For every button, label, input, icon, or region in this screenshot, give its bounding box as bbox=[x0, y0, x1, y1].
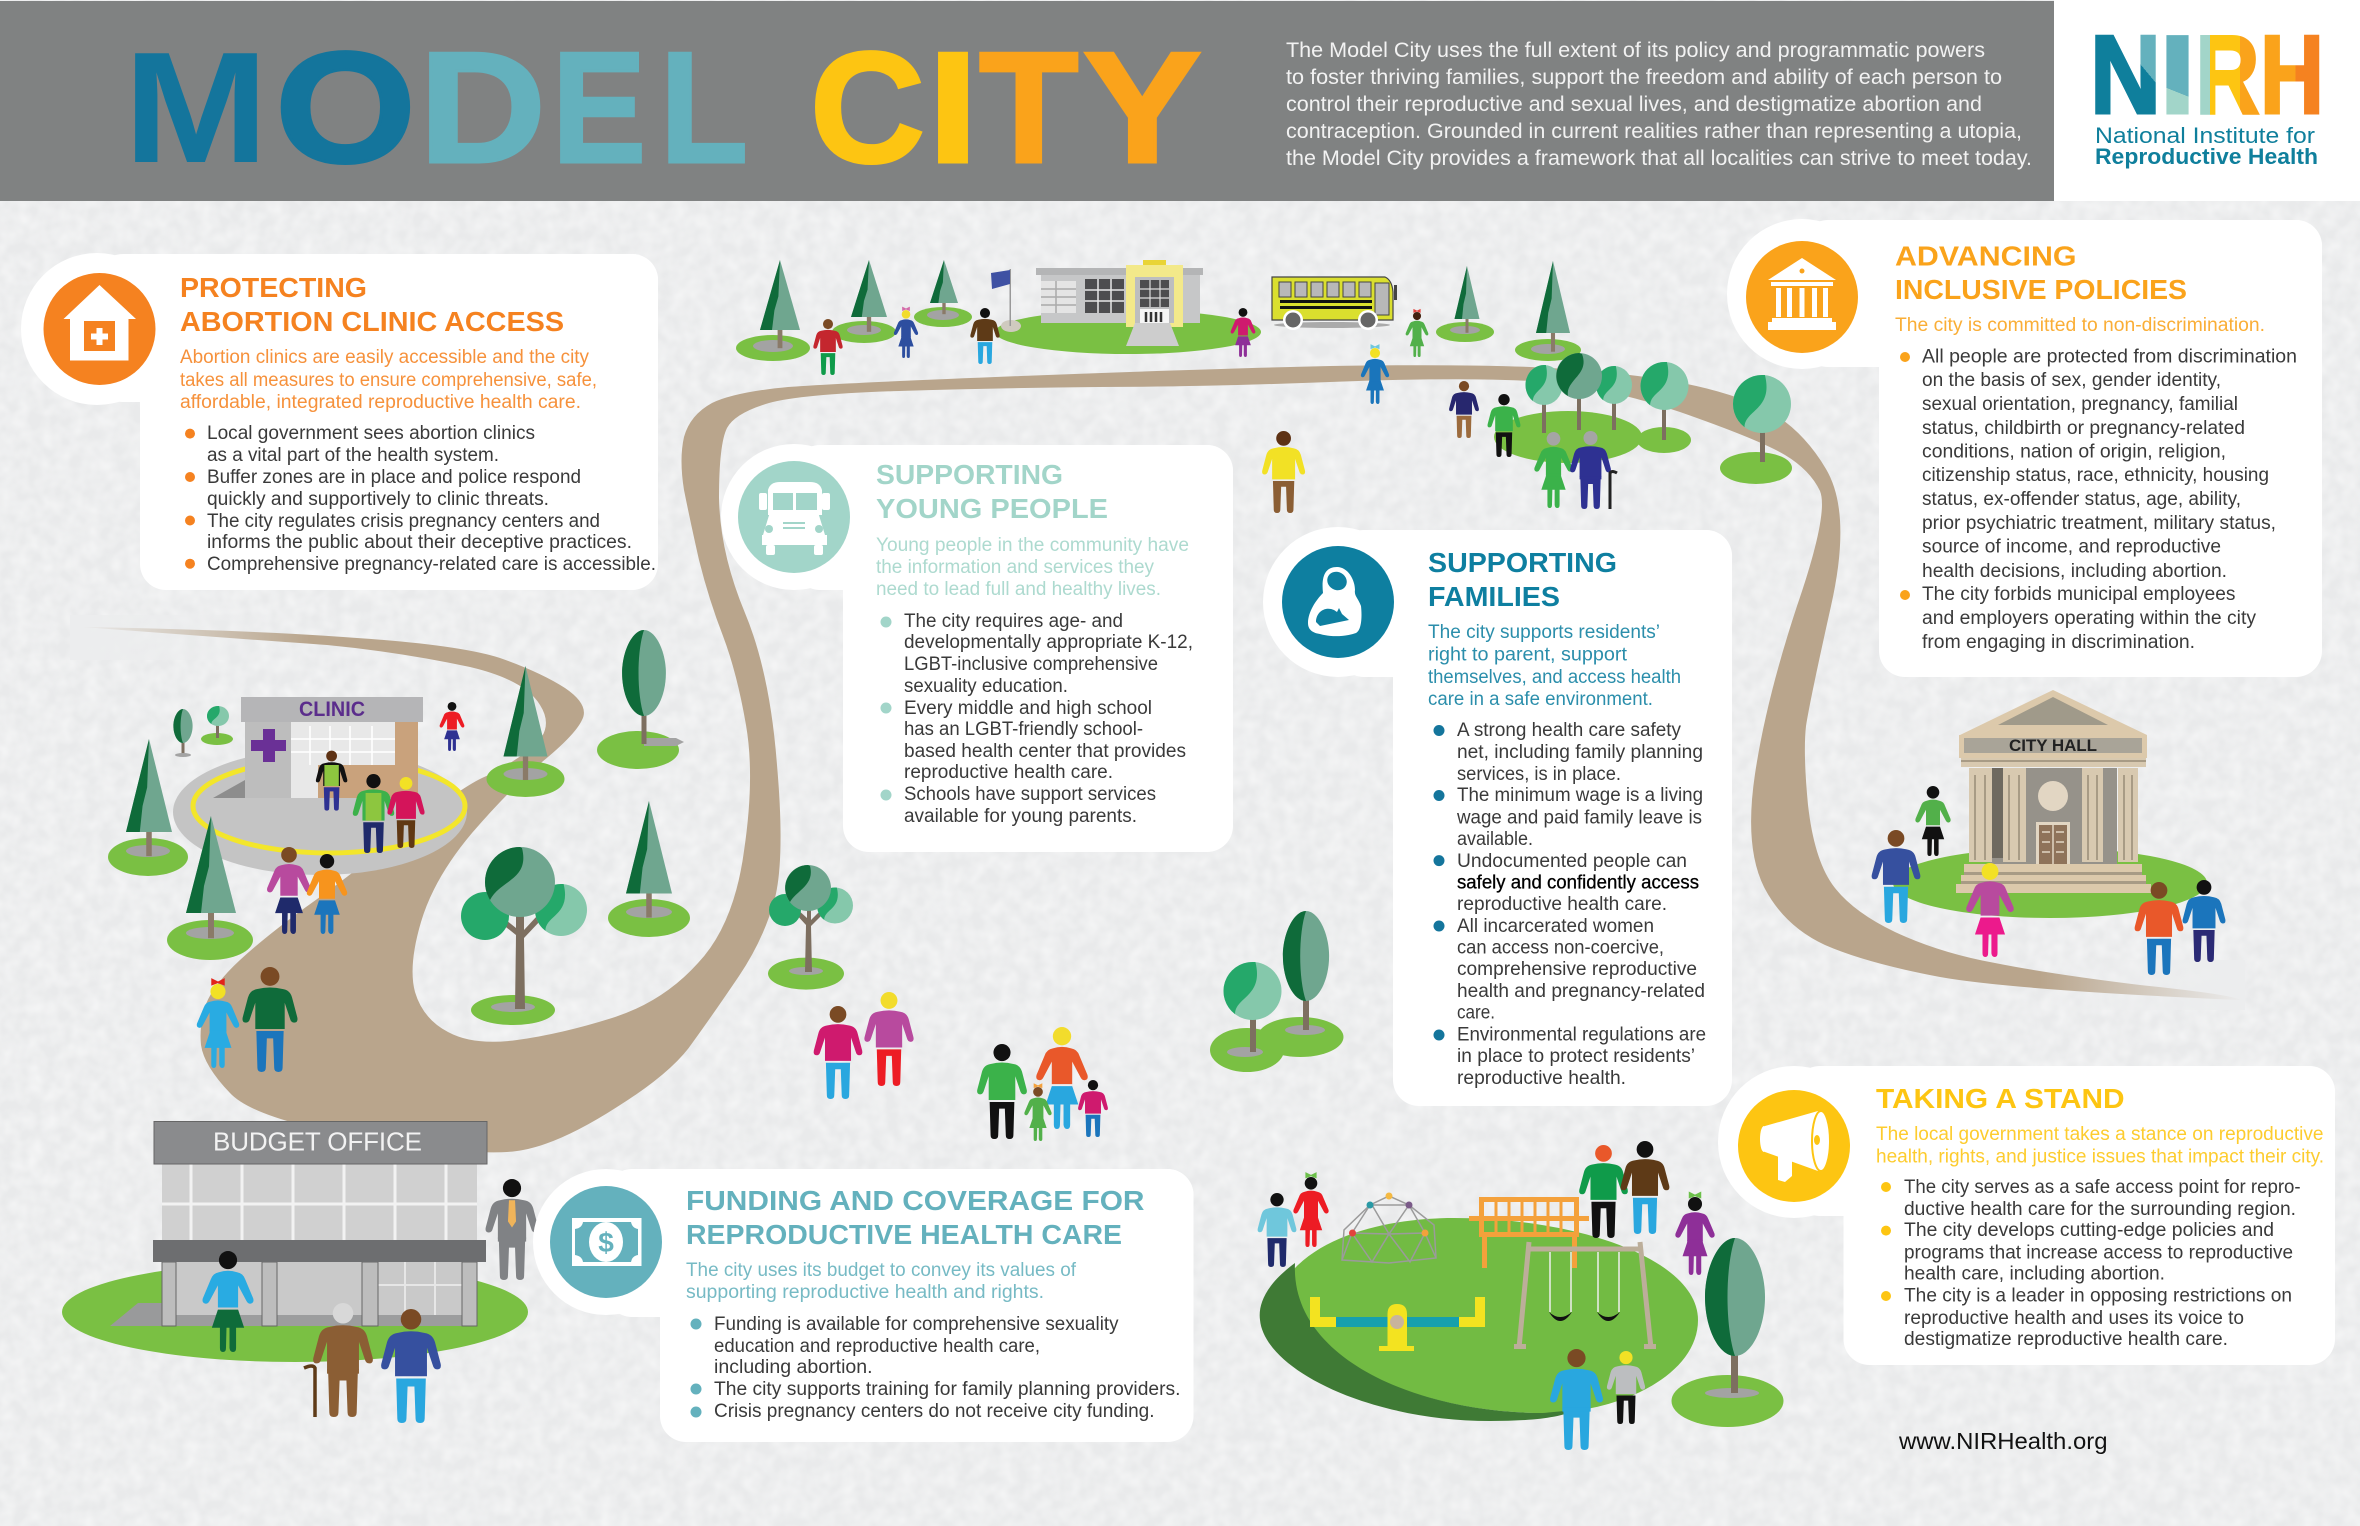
bullet list: on the basis of sex, gender identity, bbox=[1922, 370, 2221, 391]
bullet list: Environmental regulations are bbox=[1457, 1024, 1706, 1046]
person bbox=[1872, 830, 1920, 923]
logo: NIRH: N bbox=[2090, 13, 2161, 137]
panel: funding and coverage bbox=[533, 1169, 1194, 1442]
oval tree bbox=[1672, 1238, 1784, 1427]
scene: school grounds bbox=[736, 260, 1581, 361]
bullet list: can access non-coercive, bbox=[1457, 938, 1664, 959]
summary: Abortion clinics are easily accessible and the city bbox=[180, 347, 589, 368]
bullet list: All incarcerated women bbox=[1457, 916, 1654, 937]
person bbox=[307, 854, 347, 934]
oval tree bbox=[597, 630, 684, 769]
bullet list: Every middle and high school bbox=[904, 698, 1152, 719]
seesaw bbox=[1310, 1297, 1485, 1351]
person bbox=[440, 702, 464, 751]
panel background bbox=[1263, 527, 1732, 1106]
logo: NIRH: R bbox=[2196, 13, 2260, 137]
city hall building: CITY HALL bbox=[2009, 736, 2097, 755]
heading bbox=[686, 1185, 1144, 1250]
person bbox=[813, 319, 843, 375]
bullet list: health care, including abortion. bbox=[1904, 1264, 2165, 1285]
person bbox=[1966, 863, 2014, 957]
person bbox=[1579, 1145, 1628, 1238]
bullet list: Undocumented people can bbox=[1457, 851, 1687, 872]
bullet list: status, childbirth or pregnancy-related bbox=[1922, 418, 2245, 439]
person bbox=[1621, 1141, 1669, 1234]
clinic building bbox=[213, 697, 423, 798]
clinic building: CLINIC bbox=[299, 698, 365, 721]
bullet list: prior psychiatric treatment, military status, bbox=[1922, 513, 2276, 534]
elder with cane bbox=[304, 1303, 373, 1417]
bullet list: developmentally appropriate K-12, bbox=[904, 632, 1193, 653]
scene: clinic bbox=[108, 630, 1344, 1072]
playground lawn bbox=[1293, 1218, 1698, 1413]
panel background bbox=[533, 1169, 1194, 1442]
person bbox=[2135, 882, 2183, 975]
tree trunks bbox=[1542, 395, 1765, 462]
summary bbox=[1428, 622, 1681, 710]
panel: protecting abortion clinic access bbox=[21, 253, 658, 590]
person bbox=[1262, 431, 1305, 513]
tree beside road bbox=[768, 865, 853, 990]
heading: ADVANCING bbox=[1895, 241, 2076, 272]
person bbox=[864, 992, 914, 1086]
pine tree bbox=[736, 260, 810, 361]
bullet list: reproductive health and uses its voice to bbox=[1904, 1308, 2244, 1329]
panel background bbox=[721, 444, 1233, 852]
office lawn bbox=[62, 1262, 528, 1362]
person bbox=[1915, 786, 1951, 856]
bullet list: status, ex-offender status, age, ability, bbox=[1922, 489, 2241, 510]
scene: park trees top right bbox=[1494, 353, 1792, 484]
round tree bbox=[1640, 362, 1688, 410]
bullet list bbox=[1434, 720, 1706, 1089]
summary: health, rights, and justice issues that impact their city. bbox=[1876, 1147, 2324, 1168]
heading: ABORTION CLINIC ACCESS bbox=[180, 306, 564, 337]
person bbox=[381, 1309, 441, 1423]
bullet list: The city serves as a safe access point for repro- bbox=[1904, 1177, 2301, 1198]
person in suit bbox=[486, 1179, 538, 1280]
bullet list: and employers operating within the city bbox=[1922, 608, 2256, 629]
child bbox=[1078, 1080, 1108, 1137]
logo: NIRH: I bbox=[2160, 13, 2196, 137]
logo: NIRH: Reproductive Health bbox=[2095, 144, 2318, 169]
header band bbox=[0, 1, 2054, 201]
summary: supporting reproductive health and rights. bbox=[686, 1282, 1044, 1303]
panel: taking a stand bbox=[1718, 1066, 2335, 1365]
lawn bbox=[1494, 411, 1792, 484]
pine tree bbox=[914, 260, 972, 327]
heading: REPRODUCTIVE HEALTH CARE bbox=[686, 1219, 1122, 1250]
clinic plaza bbox=[173, 749, 467, 875]
title: MODEL CITY: C bbox=[810, 20, 925, 196]
bullet list: wage and paid family leave is bbox=[1456, 808, 1702, 828]
bullet list: services, is in place. bbox=[1457, 764, 1621, 785]
bullet list: health and pregnancy-related bbox=[1457, 981, 1705, 1002]
bench bbox=[1469, 1197, 1589, 1268]
summary: The city supports residents’ bbox=[1428, 622, 1660, 643]
summary: affordable, integrated reproductive health care. bbox=[180, 392, 581, 413]
title: MODEL CITY bbox=[124, 20, 1202, 196]
logo: NIRH bbox=[2090, 13, 2324, 169]
icon: dollar bill bbox=[550, 1186, 662, 1298]
pine tree bbox=[1515, 261, 1581, 361]
website url: www.NIRHealth.org bbox=[1898, 1428, 2108, 1454]
bullet list: Crisis pregnancy centers do not receive city funding. bbox=[714, 1401, 1154, 1422]
scene: city hall bbox=[1893, 690, 2207, 918]
summary: care in a safe environment. bbox=[1428, 689, 1653, 710]
bullet list bbox=[1900, 346, 2297, 653]
city hall building bbox=[1956, 690, 2151, 893]
bullet list: comprehensive reproductive bbox=[1457, 959, 1697, 980]
heading: YOUNG PEOPLE bbox=[876, 493, 1108, 524]
person bbox=[267, 847, 311, 934]
round tree bbox=[1526, 365, 1562, 405]
swing set bbox=[1514, 1242, 1656, 1349]
bullet list: Comprehensive pregnancy-related care is accessible. bbox=[207, 554, 656, 575]
heading: PROTECTING bbox=[180, 272, 367, 303]
school lawn bbox=[995, 310, 1261, 354]
bullet list: available for young parents. bbox=[904, 806, 1137, 827]
bullet list: education and reproductive health care, bbox=[714, 1336, 1040, 1357]
bullet list: conditions, nation of origin, religion, bbox=[1922, 442, 2226, 463]
bullet list bbox=[690, 1314, 1180, 1422]
summary: the information and services they bbox=[876, 557, 1154, 578]
title: MODEL CITY: E bbox=[552, 20, 646, 196]
pine tree bbox=[832, 260, 896, 343]
person bbox=[977, 1044, 1027, 1139]
intro paragraph: the Model City provides a framework that all localities can strive to meet today. bbox=[1286, 146, 2032, 170]
title: MODEL CITY: D bbox=[419, 20, 546, 196]
bullet list: The city supports training for family planning providers. bbox=[714, 1379, 1180, 1400]
bullet list: quickly and supportively to clinic threats. bbox=[207, 489, 549, 510]
bullet list: Local government sees abortion clinics bbox=[207, 423, 535, 444]
intro paragraph: control their reproductive and sexual lives, and destigmatize abortion and bbox=[1286, 92, 1982, 116]
bullet list: reproductive health care. bbox=[1457, 894, 1667, 915]
road fade left bbox=[70, 615, 310, 660]
heading: SUPPORTING bbox=[876, 459, 1063, 490]
bullet list: citizenship status, race, ethnicity, housing bbox=[1922, 465, 2269, 486]
bullet list: ductive health care for the surrounding region. bbox=[1904, 1199, 2296, 1220]
person bbox=[1293, 1172, 1329, 1247]
bullet list bbox=[185, 423, 656, 575]
title: MODEL CITY: O bbox=[275, 20, 416, 196]
road fade right bbox=[2040, 960, 2245, 1010]
pine tree bbox=[167, 816, 253, 960]
intro paragraph: contraception. Grounded in current realities rather than representing a utopia, bbox=[1286, 119, 2022, 143]
bullet list: The city requires age- and bbox=[904, 611, 1123, 632]
person bbox=[1406, 309, 1428, 357]
person bbox=[894, 307, 918, 358]
heading bbox=[876, 459, 1108, 524]
heading: FUNDING AND COVERAGE FOR bbox=[686, 1185, 1144, 1216]
person bbox=[2183, 880, 2225, 962]
summary bbox=[1876, 1124, 2324, 1168]
large tree bbox=[461, 847, 587, 1025]
bullet list: All people are protected from discrimination bbox=[1922, 346, 2297, 368]
panel background bbox=[1727, 219, 2322, 677]
panel: supporting young people bbox=[721, 444, 1233, 852]
winding road bbox=[82, 365, 2240, 1152]
person bbox=[387, 777, 425, 848]
bullet list: sexuality education. bbox=[904, 676, 1068, 697]
climbing dome bbox=[1342, 1192, 1436, 1263]
bullet list: Funding is available for comprehensive sexuality bbox=[714, 1314, 1119, 1335]
person bbox=[242, 967, 298, 1072]
bullet list: safely and confidently access bbox=[1457, 872, 1699, 894]
icon: mother and child bbox=[1282, 546, 1394, 658]
bullet list: available. bbox=[1457, 829, 1533, 850]
person bbox=[970, 308, 1000, 364]
round tree bbox=[1733, 375, 1791, 433]
bullet list: reproductive health care. bbox=[904, 762, 1113, 783]
bullet list: including abortion. bbox=[714, 1357, 873, 1378]
bullet list: source of income, and reproductive bbox=[1922, 537, 2221, 558]
heading: TAKING A STAND bbox=[1876, 1083, 2125, 1114]
round tree bbox=[1596, 366, 1632, 404]
bullet list: Schools have support services bbox=[904, 784, 1156, 805]
pine tree bbox=[486, 666, 564, 797]
heading bbox=[1428, 547, 1617, 612]
logo box bbox=[2054, 0, 2360, 201]
bullet list: sexual orientation, pregnancy, familial bbox=[1922, 394, 2238, 415]
bullet list bbox=[880, 611, 1193, 827]
person bbox=[197, 978, 239, 1068]
summary: right to parent, support bbox=[1428, 644, 1628, 666]
person bbox=[1675, 1192, 1715, 1275]
small round tree bbox=[201, 706, 233, 745]
summary: The city uses its budget to convey its values of bbox=[686, 1260, 1077, 1281]
summary: takes all measures to ensure comprehensive, safe, bbox=[180, 370, 597, 391]
panel: advancing inclusive policies bbox=[1727, 219, 2322, 677]
bullet list: has an LGBT-friendly school- bbox=[904, 719, 1143, 740]
summary: The city is committed to non-discrimination. bbox=[1895, 315, 2265, 336]
bullet list: in place to protect residents’ bbox=[1457, 1046, 1695, 1067]
title: MODEL CITY: T bbox=[979, 20, 1079, 196]
intro paragraph: The Model City uses the full extent of its policy and programmatic powers bbox=[1286, 38, 1985, 62]
clinic escort bbox=[353, 774, 394, 853]
person bbox=[1361, 344, 1389, 404]
bullet list: net, including family planning bbox=[1457, 742, 1703, 763]
bullet list: A strong health care safety bbox=[1457, 720, 1681, 741]
bullet list: The city develops cutting-edge policies and bbox=[1904, 1220, 2274, 1241]
icon: school bus bbox=[738, 461, 850, 573]
person bbox=[1607, 1351, 1645, 1424]
bullet list: from engaging in discrimination. bbox=[1922, 632, 2195, 653]
panel: supporting families bbox=[1263, 527, 1732, 1106]
school bus bbox=[1272, 277, 1397, 330]
bullet list bbox=[1881, 1177, 2301, 1350]
summary bbox=[180, 347, 597, 413]
bullet list: LGBT-inclusive comprehensive bbox=[904, 654, 1158, 675]
clinic escort bbox=[316, 751, 347, 811]
pine tree bbox=[608, 801, 690, 937]
bullet list: reproductive health. bbox=[1457, 1068, 1626, 1089]
person bbox=[1487, 394, 1521, 457]
bullet list: informs the public about their deceptive practices. bbox=[207, 532, 632, 553]
title: MODEL CITY: M bbox=[124, 20, 268, 196]
bullet list: based health center that provides bbox=[904, 741, 1186, 762]
budget office building bbox=[110, 1122, 487, 1326]
panel background bbox=[21, 253, 658, 590]
bullet list: programs that increase access to reproductive bbox=[1904, 1242, 2293, 1264]
city hall lawn bbox=[1893, 848, 2207, 918]
icon: megaphone bbox=[1738, 1090, 1850, 1202]
summary: themselves, and access health bbox=[1428, 667, 1681, 688]
heading bbox=[180, 272, 564, 337]
intro paragraph bbox=[1286, 38, 2032, 170]
person bbox=[1534, 432, 1573, 508]
elder with cane bbox=[1570, 431, 1617, 509]
school building bbox=[1036, 260, 1203, 346]
summary: The local government takes a stance on reproductive bbox=[1876, 1124, 2324, 1145]
icon: dollar bill: $ bbox=[598, 1227, 614, 1258]
heading: INCLUSIVE POLICIES bbox=[1895, 274, 2187, 305]
buffer zone ring bbox=[193, 759, 465, 853]
icon: government columns bbox=[1746, 241, 1858, 353]
title: MODEL CITY: I bbox=[928, 20, 978, 196]
round tree dark bbox=[1556, 353, 1602, 399]
bullet list: destigmatize reproductive health care. bbox=[1904, 1329, 2228, 1350]
tree pair bbox=[1210, 911, 1344, 1072]
person bbox=[1231, 308, 1255, 357]
summary: need to lead full and healthy lives. bbox=[876, 579, 1161, 600]
bullet list: care. bbox=[1457, 1003, 1495, 1024]
small oval tree bbox=[173, 709, 193, 757]
pine tree bbox=[1436, 266, 1494, 342]
intro paragraph: to foster thriving families, support the freedom and ability of each person to bbox=[1286, 65, 2002, 89]
bullet list: The minimum wage is a living bbox=[1457, 785, 1703, 806]
logo: NIRH: H bbox=[2260, 13, 2324, 137]
summary bbox=[686, 1260, 1077, 1303]
heading: SUPPORTING bbox=[1428, 547, 1617, 578]
budget office building: BUDGET OFFICE bbox=[213, 1126, 422, 1156]
summary: Young people in the community have bbox=[876, 535, 1189, 556]
summary bbox=[876, 535, 1189, 600]
person bbox=[1550, 1349, 1603, 1450]
bullet list: as a vital part of the health system. bbox=[207, 445, 499, 466]
bullet list: The city regulates crisis pregnancy centers and bbox=[207, 511, 600, 532]
scene: budget office bbox=[62, 1122, 528, 1362]
panel background bbox=[1718, 1066, 2335, 1365]
bullet list: Buffer zones are in place and police respond bbox=[207, 467, 581, 488]
pine tree bbox=[108, 739, 188, 876]
icon: clinic house bbox=[44, 273, 156, 385]
bullet list: The city is a leader in opposing restrictions on bbox=[1904, 1286, 2292, 1307]
person bbox=[1449, 381, 1479, 438]
heading: FAMILIES bbox=[1428, 581, 1560, 612]
person bbox=[202, 1251, 254, 1352]
title: MODEL CITY: L bbox=[660, 20, 748, 196]
person bbox=[1258, 1193, 1296, 1267]
person bbox=[814, 1006, 862, 1099]
child bbox=[1024, 1083, 1052, 1141]
flag bbox=[991, 269, 1021, 332]
title: MODEL CITY: Y bbox=[1083, 20, 1202, 196]
bullet list: health decisions, including abortion. bbox=[1922, 561, 2227, 582]
bullet list: The city forbids municipal employees bbox=[1922, 584, 2236, 605]
logo: NIRH: National Institute for bbox=[2095, 123, 2315, 148]
heading bbox=[1895, 241, 2187, 305]
playground base shadow bbox=[1260, 1263, 1575, 1421]
scene: playground bbox=[1260, 1192, 1784, 1427]
person bbox=[1036, 1027, 1088, 1129]
